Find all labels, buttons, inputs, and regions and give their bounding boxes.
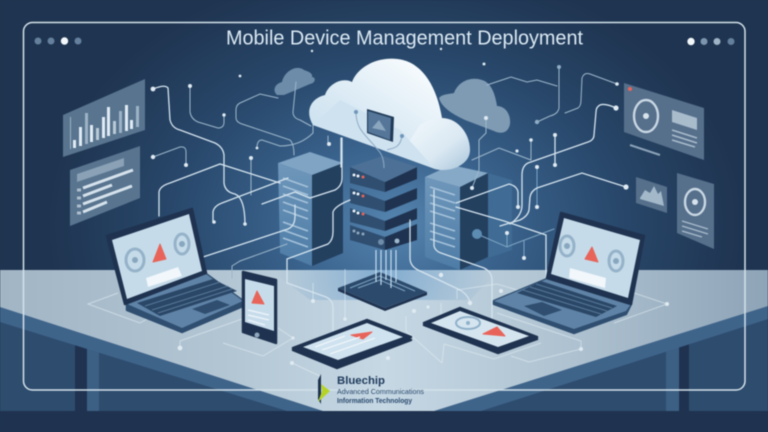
right dashboard panel <box>624 83 704 160</box>
server tower left <box>278 152 343 266</box>
alert icon <box>252 291 264 304</box>
server base plate <box>338 272 427 311</box>
main cloud <box>309 59 470 170</box>
server unit 1 <box>350 156 417 192</box>
left chart panel <box>63 79 145 157</box>
laptop screen <box>112 214 202 299</box>
status lights <box>352 174 400 245</box>
connector nodes <box>151 48 669 365</box>
right gauge panel <box>677 173 714 249</box>
bar chart <box>70 105 139 149</box>
server unit 4 <box>350 224 417 250</box>
keyboard <box>137 279 237 316</box>
large cloud right <box>439 79 510 133</box>
server tower right <box>425 165 512 270</box>
table legs and underside <box>0 300 768 411</box>
title: Mobile Device Management Deployment <box>226 28 583 50</box>
alert icon <box>351 332 372 339</box>
center tablet <box>293 320 411 368</box>
right laptop <box>494 213 644 333</box>
phone <box>243 272 276 343</box>
alert icon <box>153 244 166 262</box>
connector lines bright <box>153 86 626 331</box>
left laptop <box>107 209 243 332</box>
left list panel <box>70 146 140 226</box>
logo text: Information Technology <box>337 396 413 405</box>
server unit 3 <box>350 208 417 231</box>
central server stack <box>350 156 417 288</box>
logo <box>318 374 424 405</box>
table trace lines <box>88 269 667 376</box>
right area chart panel <box>636 177 667 213</box>
logo mark <box>318 374 330 404</box>
cloud chip icon <box>367 109 394 142</box>
alert icon <box>483 327 505 336</box>
server unit 2 <box>350 188 417 212</box>
table top <box>0 270 768 411</box>
right window dots <box>687 38 734 45</box>
connector lines soft <box>153 67 617 278</box>
small cloud left <box>275 68 315 95</box>
logo text: Advanced Communications <box>337 387 424 396</box>
laptop screen <box>551 218 640 298</box>
right tablet <box>424 308 537 353</box>
logo text: Bluechip <box>337 375 385 387</box>
keyboard <box>517 281 617 317</box>
left window dots <box>34 37 82 45</box>
alert icon <box>585 247 598 262</box>
frame <box>24 22 745 390</box>
logo text <box>337 375 424 405</box>
